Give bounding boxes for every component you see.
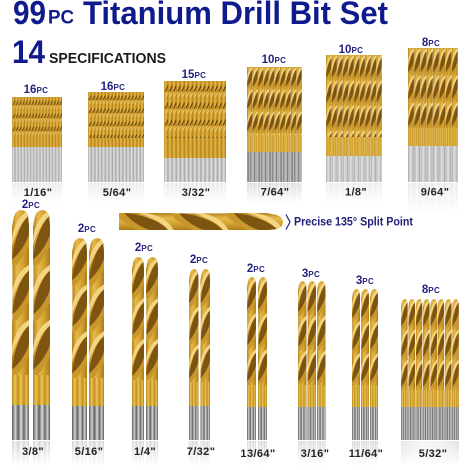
bit group: 3/16 inch, 3 pieces: 3PC [302,268,320,280]
bit group: 1/8 inch, 10 pieces: 1/8" [345,186,367,198]
bit group: 13/64 inch, 2 pieces: 2PC [247,263,265,275]
icon: chevron pointer [286,214,290,230]
bit group: 5/32 inch, 8 pieces [399,284,461,466]
bit group: 3/8 inch, 2 pieces: 3/8" [22,446,44,458]
bit group: 3/32 inch, 15 pieces: 3/32" [182,187,210,199]
bit group: 1/4 inch, 2 pieces [130,242,160,466]
bit group: 7/64 inch, 10 pieces [247,54,302,203]
bit group: 1/16 inch, 16 pieces [12,84,62,203]
bit group: 5/32 inch, 8 pieces: 5/32" [419,448,447,460]
bit group: 1/4 inch, 2 pieces: 2PC [135,242,153,254]
subtitle: 14 specifications: SPECIFICATIONS [49,51,166,67]
bit group: 1/16 inch, 16 pieces: 1/16" [24,187,52,199]
bit group: 3/8 inch, 2 pieces: 2PC [22,199,40,211]
bit group: 5/16 inch, 2 pieces: 5/16" [75,446,103,458]
subtitle: 14 specifications: 14 [12,34,45,70]
bit group: 3/16 inch, 3 pieces [296,268,329,466]
bit group: 1/8 inch, 10 pieces: 10PC [339,44,363,56]
bit group: 5/16 inch, 2 pieces: 2PC [78,223,96,235]
bit group: 5/64 inch, 16 pieces [88,81,144,203]
bit group: 1/8 inch, 10 pieces [326,44,382,203]
bit group: 9/64 inch, 8 pieces [408,37,458,213]
bit group: 7/32 inch, 2 pieces [187,254,215,466]
bit group: 3/16 inch, 3 pieces: 3/16" [301,448,329,460]
subtitle: 14 specifications [12,34,166,70]
bit group: 7/32 inch, 2 pieces: 7/32" [187,446,215,458]
bit group: 11/64 inch, 3 pieces: 3PC [356,275,374,287]
bit group: 3/32 inch, 15 pieces [164,69,226,203]
bit group: 5/64 inch, 16 pieces: 16PC [101,81,125,93]
close-up horizontal drill bit [119,213,283,230]
bit group: 5/64 inch, 16 pieces: 5/64" [103,187,131,199]
bit group: 7/64 inch, 10 pieces: 7/64" [261,186,289,198]
bit group: 9/64 inch, 8 pieces: 9/64" [421,186,449,198]
bit group: 3/8 inch, 2 pieces [10,199,52,466]
bit group: 5/16 inch, 2 pieces [70,223,106,466]
title: PC [48,8,74,28]
bit group: 7/64 inch, 10 pieces: 10PC [262,54,286,66]
bit group: 3/32 inch, 15 pieces: 15PC [182,69,206,81]
bit group: 7/32 inch, 2 pieces: 2PC [190,254,208,266]
bit group: 13/64 inch, 2 pieces [240,263,276,466]
bit group: 9/64 inch, 8 pieces: 8PC [422,37,440,49]
callout: split point: Precise 135° Split Point [294,216,413,228]
bit group: 11/64 inch, 3 pieces: 11/64" [349,448,383,460]
bit group: 5/32 inch, 8 pieces: 8PC [422,284,440,296]
bit group: 1/16 inch, 16 pieces: 16PC [24,84,48,96]
bit group: 11/64 inch, 3 pieces [349,275,383,466]
bit group: 13/64 inch, 2 pieces: 13/64" [240,448,276,460]
bit group: 1/4 inch, 2 pieces: 1/4" [134,446,156,458]
